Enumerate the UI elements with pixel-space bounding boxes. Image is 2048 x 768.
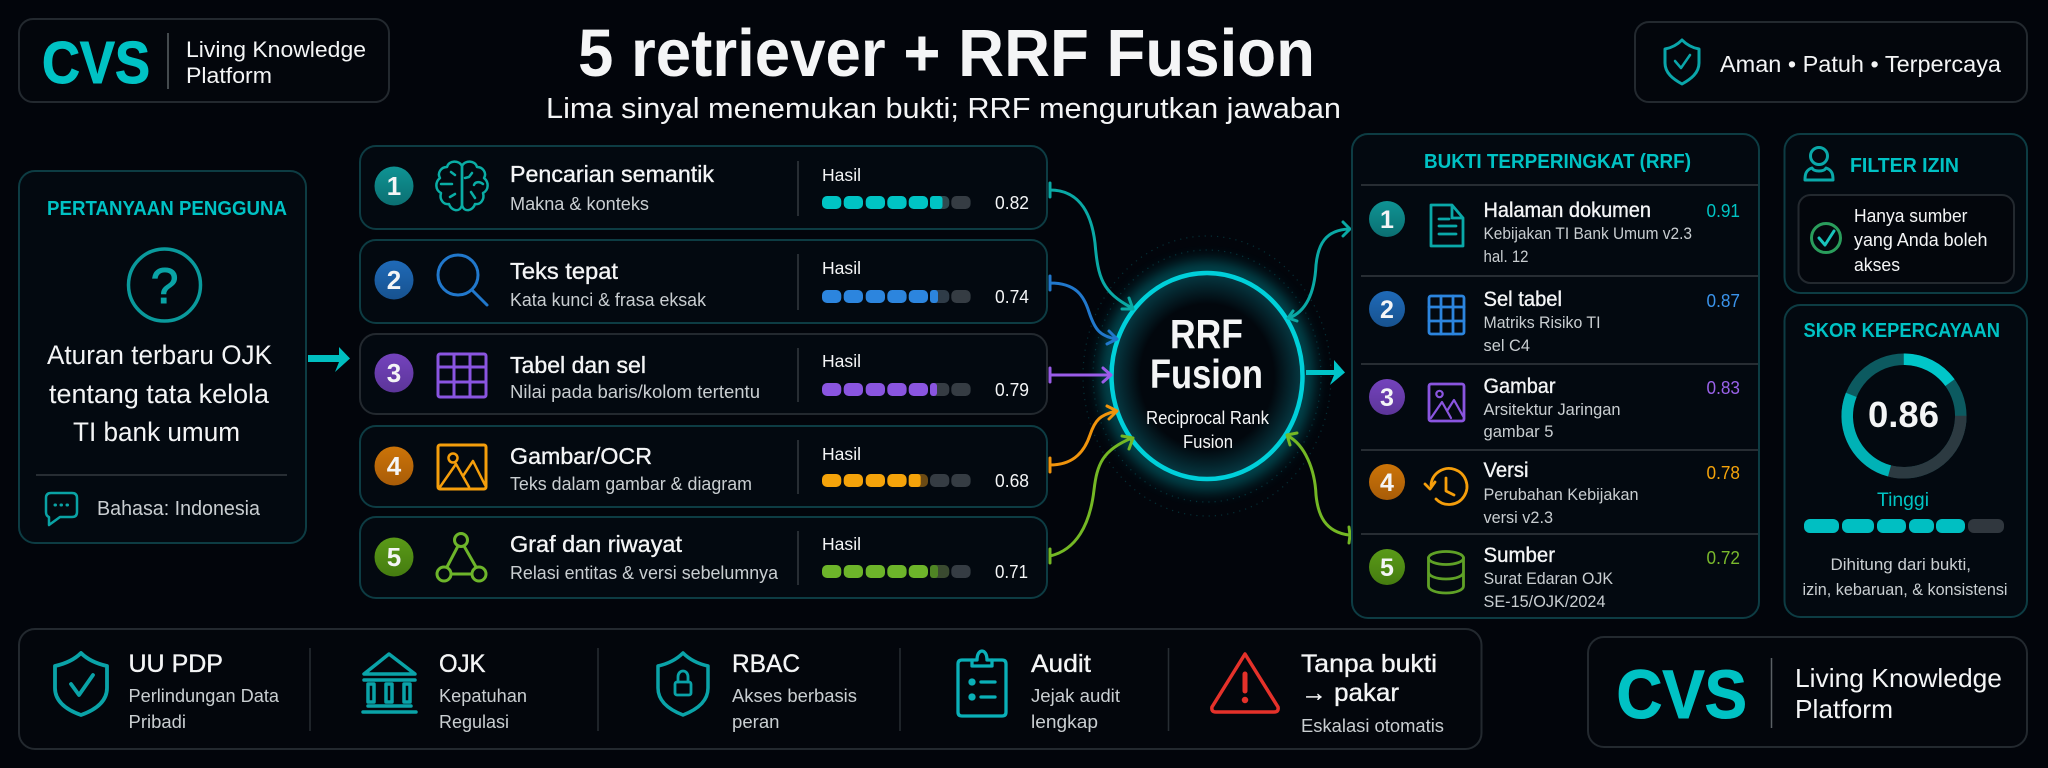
evidence row 3	[1369, 375, 1740, 441]
icon: user	[1805, 148, 1833, 180]
evidence row 1: hal. 12	[1484, 247, 1528, 266]
icon: table cell	[1429, 296, 1464, 334]
panel: retriever 3: Hasil	[822, 351, 861, 371]
panel: skor kepercayaan	[1784, 305, 2027, 617]
evidence row 4	[1369, 459, 1740, 527]
item: audit: lengkap	[1031, 712, 1098, 732]
panel: retriever 1: Hasil	[822, 165, 861, 185]
panel: retriever 5: Hasil	[822, 534, 861, 554]
arrow: rrf to ranked evidence	[1306, 360, 1345, 385]
connector 2	[1050, 276, 1117, 344]
evidence row 4: 4	[1380, 469, 1394, 497]
panel: pertanyaan pengguna: Aturan terbaru OJK	[47, 340, 272, 370]
rrf fusion circle	[1110, 271, 1304, 481]
evidence row 3: 0.83	[1706, 378, 1740, 398]
icon: check circle	[1812, 224, 1840, 252]
icon: table	[438, 354, 486, 397]
rrf fusion circle: Fusion	[1150, 351, 1263, 397]
number badge 4: 4	[387, 451, 402, 481]
panel: retriever 4: Teks dalam gambar & diagram	[510, 474, 752, 494]
connector 4	[1050, 406, 1117, 472]
icon: brain	[436, 162, 488, 210]
rrf fusion circle: RRF	[1170, 311, 1243, 357]
icon: graph	[437, 534, 486, 581]
panel: retriever 5: Graf dan riwayat	[510, 531, 683, 557]
item: rbac: peran	[732, 712, 780, 732]
panel: bukti terperingkat	[1352, 134, 1759, 618]
number badge 3: 3	[387, 358, 401, 388]
panel: skor kepercayaan: 0.86	[1868, 394, 1939, 435]
score bar 4	[822, 474, 971, 487]
panel: retriever 4: Hasil	[822, 444, 861, 464]
panel: pertanyaan pengguna: TI bank umum	[73, 417, 240, 447]
evidence row 4: Versi	[1484, 459, 1528, 482]
evidence row 5: 5	[1380, 554, 1394, 582]
panel: filter izin: FILTER IZIN	[1850, 155, 1959, 177]
panel: retriever 5	[360, 517, 1047, 598]
evidence row 3: Arsitektur Jaringan	[1484, 400, 1620, 419]
panel: filter izin: yang Anda boleh	[1854, 230, 1988, 250]
evidence row 5: 0.72	[1706, 548, 1740, 568]
panel: retriever 2: Hasil	[822, 258, 861, 278]
panel: skor kepercayaan: Tinggi	[1877, 490, 1929, 511]
item: audit: Audit	[1031, 650, 1091, 678]
icon: history	[1425, 468, 1467, 504]
connector 3	[1050, 368, 1111, 382]
number badge 2: 2	[387, 265, 401, 295]
rrf dotted rings	[1083, 236, 1331, 516]
panel: pertanyaan pengguna: PERTANYAAN PENGGUNA	[47, 198, 287, 220]
evidence row 3: gambar 5	[1484, 422, 1554, 441]
evidence row 3: 3	[1380, 384, 1394, 412]
panel: retriever 1: Makna & konteks	[510, 194, 649, 214]
item: tanpa bukti: Tanpa bukti	[1301, 650, 1437, 678]
item: audit	[958, 650, 1120, 732]
panel: filter izin: akses	[1854, 255, 1900, 275]
evidence row 2: 2	[1380, 296, 1394, 324]
logo bottom right	[1588, 637, 2027, 747]
badge: aman patuh terpercaya: Aman • Patuh • Terpercaya	[1720, 51, 2001, 77]
gauge ring	[1834, 346, 1974, 486]
evidence row 4: Perubahan Kebijakan	[1484, 485, 1638, 504]
item: tanpa bukti	[1212, 650, 1444, 736]
panel: retriever 2: Kata kunci & frasa eksak	[510, 290, 707, 310]
logo top left: Platform	[186, 63, 272, 88]
evidence row 5: SE-15/OJK/2024	[1484, 592, 1606, 611]
panel: skor kepercayaan: SKOR KEPERCAYAAN	[1804, 320, 2000, 342]
evidence row 1: 0.91	[1706, 201, 1740, 221]
item: uu pdp	[55, 650, 280, 732]
panel: retriever 5: Relasi entitas & versi sebelumnya	[510, 563, 779, 583]
evidence row 5	[1369, 544, 1740, 611]
panel: skor kepercayaan: Dihitung dari bukti,	[1830, 555, 1971, 574]
item: audit: Jejak audit	[1031, 686, 1120, 706]
panel: retriever 3: Tabel dan sel	[510, 352, 646, 378]
panel: pertanyaan pengguna: Bahasa: Indonesia	[97, 498, 261, 520]
arrow: question to retrievers	[308, 347, 350, 372]
logo bottom right: Living Knowledge	[1795, 663, 2002, 693]
item: rbac: Akses berbasis	[732, 686, 857, 706]
panel: retriever 3	[360, 334, 1047, 414]
item: rbac	[658, 650, 857, 732]
number badge 1: 1	[387, 171, 401, 201]
panel: filter izin	[1784, 134, 2027, 293]
panel: skor kepercayaan: izin, kebaruan, & konsistensi	[1802, 580, 2008, 599]
icon: bank	[363, 654, 416, 712]
connector evidence 5	[1287, 433, 1350, 543]
number badge 5: 5	[387, 542, 401, 572]
rrf fusion circle: Reciprocal Rank	[1146, 408, 1270, 428]
evidence row 2: Matriks Risiko TI	[1484, 313, 1600, 332]
logo bottom right: CVS	[1616, 656, 1747, 733]
evidence row 5: Surat Edaran OJK	[1484, 569, 1614, 588]
panel: retriever 4: 0.68	[995, 470, 1029, 491]
panel: retriever 1: 0.82	[995, 192, 1029, 213]
item: uu pdp: Pribadi	[128, 712, 186, 732]
evidence row 1	[1369, 199, 1740, 266]
item: ojk: Kepatuhan	[439, 686, 527, 706]
panel: pertanyaan pengguna: tentang tata kelola	[49, 379, 270, 409]
item: ojk: OJK	[439, 650, 486, 678]
icon: question: ?	[151, 258, 178, 314]
score bar 2	[822, 290, 971, 303]
evidence row 1: Halaman dokumen	[1484, 199, 1651, 222]
confidence bar	[1804, 519, 2004, 533]
evidence row 2: sel C4	[1484, 336, 1530, 355]
score bar 5	[822, 565, 971, 578]
item: ojk: Regulasi	[439, 712, 509, 732]
score bar 1	[822, 196, 971, 209]
rrf fusion circle: Fusion	[1183, 432, 1233, 452]
title: 5 retriever + RRF Fusion	[578, 16, 1315, 91]
evidence row 4: 0.78	[1706, 463, 1740, 483]
connector 1	[1050, 183, 1133, 309]
icon: database	[1428, 552, 1464, 593]
icon: picture	[1429, 384, 1464, 421]
panel: compliance strip	[19, 629, 1482, 749]
number badge 1	[374, 166, 414, 206]
item: rbac: RBAC	[732, 650, 800, 678]
item: uu pdp: Perlindungan Data	[128, 686, 280, 706]
panel: retriever 1	[360, 146, 1047, 229]
number badge 4	[374, 446, 414, 486]
panel: retriever 2: 0.74	[995, 286, 1029, 307]
item: uu pdp: UU PDP	[128, 650, 223, 678]
panel: filter izin: Hanya sumber	[1854, 206, 1968, 226]
number badge 5	[374, 538, 414, 576]
icon: chat	[46, 493, 77, 525]
panel: retriever 1: Pencarian semantik	[510, 161, 714, 187]
item: tanpa bukti: Eskalasi otomatis	[1301, 716, 1444, 736]
icon: shield check	[55, 653, 107, 715]
icon: shield check	[1665, 40, 1699, 84]
panel: retriever 4	[360, 426, 1047, 507]
panel: retriever 2: Teks tepat	[510, 258, 619, 284]
evidence row 1: 1	[1380, 206, 1394, 234]
evidence row 1: Kebijakan TI Bank Umum v2.3	[1484, 224, 1692, 243]
logo bottom right: Platform	[1795, 694, 1893, 724]
badge: aman patuh terpercaya	[1635, 22, 2027, 102]
logo top left: CVS	[42, 30, 150, 96]
panel: retriever 5: 0.71	[995, 561, 1028, 582]
subtitle: Lima sinyal menemukan bukti; RRF mengurutkan jawaban	[546, 93, 1341, 125]
panel: pertanyaan pengguna	[19, 171, 306, 543]
icon: shield lock	[658, 653, 708, 715]
logo top left: Living Knowledge	[186, 37, 366, 62]
evidence row 2	[1369, 288, 1740, 355]
evidence row 2: Sel tabel	[1484, 288, 1562, 311]
connector 5	[1050, 436, 1133, 563]
evidence row 2: 0.87	[1706, 291, 1740, 311]
icon: search	[438, 255, 487, 305]
item: ojk	[363, 650, 527, 732]
panel: retriever 4: Gambar/OCR	[510, 443, 652, 469]
icon: image	[438, 445, 486, 489]
item: tanpa bukti: → pakar	[1301, 679, 1399, 707]
icon: question	[128, 249, 200, 321]
number badge 3	[374, 354, 414, 392]
panel: retriever 2	[360, 240, 1047, 323]
icon: document	[1431, 205, 1463, 246]
icon: warning	[1212, 654, 1278, 712]
panel: bukti terperingkat: BUKTI TERPERINGKAT (RRF)	[1424, 151, 1691, 173]
evidence row 3: Gambar	[1484, 375, 1556, 398]
connector evidence 1	[1288, 222, 1350, 321]
score bar 3	[822, 383, 971, 396]
panel: retriever 3: Nilai pada baris/kolom tertentu	[510, 382, 760, 402]
logo top left	[19, 19, 389, 102]
evidence row 4: versi v2.3	[1484, 508, 1553, 527]
evidence row 5: Sumber	[1484, 544, 1555, 567]
number badge 2	[374, 260, 414, 300]
panel: retriever 3: 0.79	[995, 379, 1029, 400]
icon: clipboard	[958, 651, 1006, 716]
